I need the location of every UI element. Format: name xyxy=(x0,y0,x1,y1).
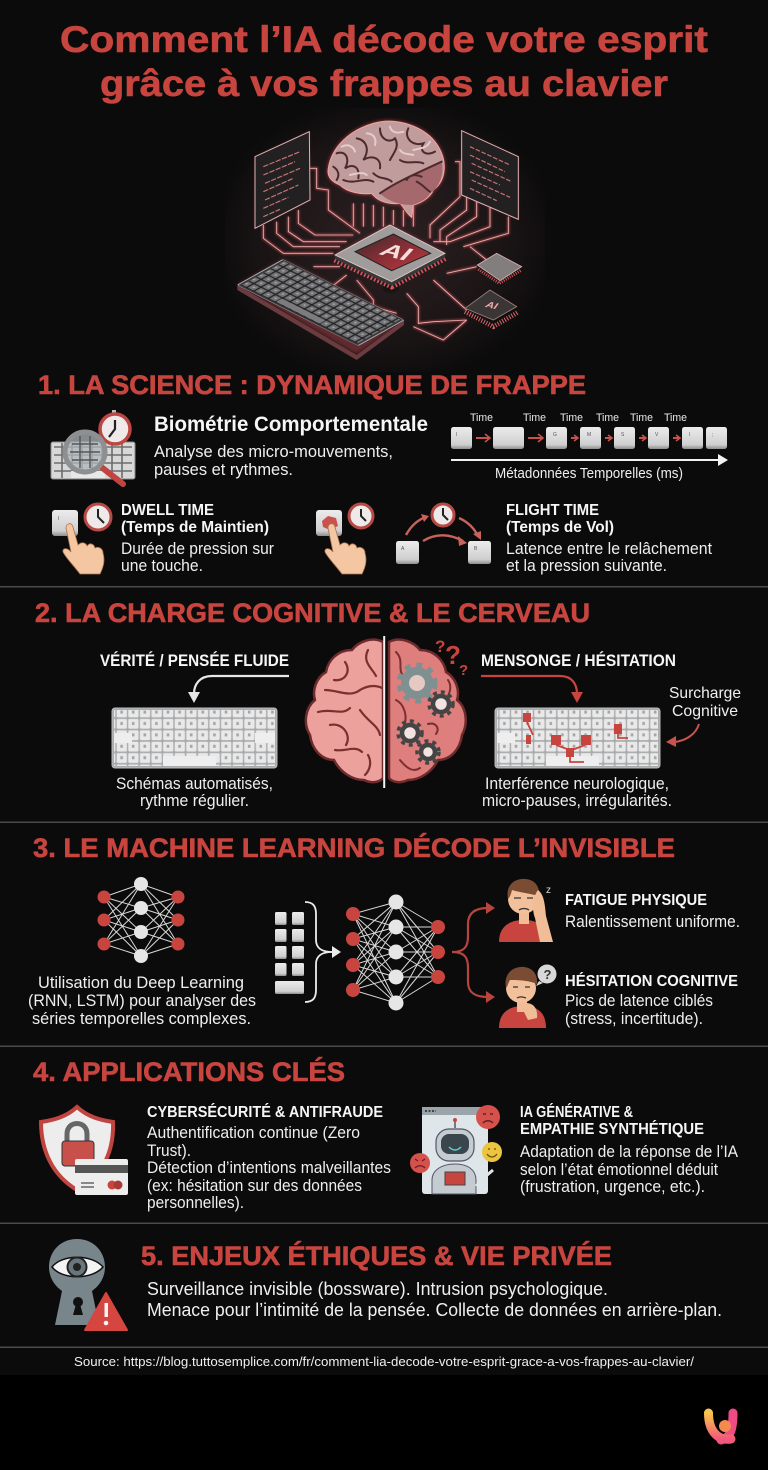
panel: section 2, charge cognitive xyxy=(35,598,741,810)
text: deep learning: (RNN, LSTM) pour analyser des xyxy=(28,991,256,1010)
diagram: key timing sequence: Time xyxy=(560,412,583,424)
arrow: network to outcomes xyxy=(452,902,495,1003)
AI processor chip xyxy=(335,225,445,293)
diagram: key timing sequence: Time xyxy=(630,412,653,424)
small AI chip xyxy=(465,290,517,327)
text: dwell time: Durée de pression sur xyxy=(121,539,274,558)
text: flight time: (Temps de Vol) xyxy=(506,519,614,536)
text: hésitation cognitive: Pics de latence ciblés xyxy=(565,991,713,1010)
text: ia générative: Adaptation de la réponse de l’IA xyxy=(520,1142,739,1161)
text: schémas automatisés: Schémas automatisés, xyxy=(116,774,273,793)
panel: section 5, enjeux éthiques xyxy=(49,1239,722,1330)
icon: hesitant person xyxy=(499,964,556,1028)
icon: neural network small xyxy=(98,877,184,963)
text: deep learning xyxy=(28,973,256,1028)
label: surcharge cognitive: Cognitive xyxy=(672,703,738,720)
heading: section 2: 2. LA CHARGE COGNITIVE & LE CERVEAU xyxy=(35,598,590,628)
label: surcharge cognitive xyxy=(669,685,741,720)
text: dwell time: une touche. xyxy=(121,556,203,575)
text: analyse xyxy=(154,442,393,479)
text: cybersécurité: Authentification continue (Zero xyxy=(147,1123,360,1142)
diagram: key timing sequence xyxy=(451,412,728,482)
text: interférence: Interférence neurologique, xyxy=(485,774,669,793)
text: hésitation cognitive xyxy=(565,971,738,1028)
brain xyxy=(328,121,444,217)
panel: section 4, applications xyxy=(33,1057,739,1212)
icon: hesitant person: ? xyxy=(544,967,552,982)
title: grâce à vos frappes au clavier xyxy=(100,63,668,104)
text: fatigue physique: FATIGUE PHYSIQUE xyxy=(565,892,707,909)
panel: section 3, machine learning xyxy=(28,833,740,1028)
heading: section 3: 3. LE MACHINE LEARNING DÉCODE L’INVISIBLE xyxy=(33,833,675,863)
text: schémas automatisés: rythme régulier. xyxy=(140,791,249,810)
text: dwell time xyxy=(121,502,274,575)
icon: split brain xyxy=(306,636,468,788)
diagram: key timing sequence: M xyxy=(587,432,591,438)
text: fatigue physique xyxy=(565,892,740,931)
heading: section 1: 1. LA SCIENCE : DYNAMIQUE DE FRAPPE xyxy=(38,370,586,400)
icon: split brain: ? xyxy=(445,640,461,670)
diagram: key timing sequence: Métadonnées Temporelles (ms) xyxy=(495,465,683,482)
arrow: brace into network xyxy=(305,902,341,1002)
arrow: vérité to keyboard xyxy=(188,676,289,703)
text: enjeux xyxy=(147,1279,722,1320)
icon: input keys xyxy=(275,912,304,994)
text: deep learning: Utilisation du Deep Learning xyxy=(38,973,244,992)
icon: split brain: ? xyxy=(435,637,445,656)
text: cybersécurité xyxy=(147,1104,391,1212)
text: interférence xyxy=(482,774,672,810)
text: dwell time: DWELL TIME xyxy=(121,502,214,519)
panel: section 1, la science xyxy=(38,370,728,575)
text: ia générative xyxy=(520,1104,739,1196)
text: flight time xyxy=(506,502,712,575)
text: cybersécurité: personnelles). xyxy=(147,1193,244,1212)
diagram: key timing sequence: G xyxy=(553,432,557,438)
keyboard xyxy=(237,259,404,360)
text: enjeux: Surveillance invisible (bossware). Intrusion psychologique. xyxy=(147,1279,608,1299)
left keyboard xyxy=(112,708,277,768)
text: cybersécurité: CYBERSÉCURITÉ & ANTIFRAUDE xyxy=(147,1104,383,1121)
hero illustration: brain, AI chip and keyboard xyxy=(225,108,545,372)
diagram: key timing sequence: Time xyxy=(596,412,619,424)
icon: split brain: ? xyxy=(459,662,468,679)
text: hésitation cognitive: HÉSITATION COGNITIVE xyxy=(565,971,738,990)
arrow: surcharge to keyboard xyxy=(666,724,699,747)
icon: dwell time key and hand xyxy=(52,504,111,574)
title: Comment l’IA décode votre esprit xyxy=(60,19,708,60)
text: flight time: FLIGHT TIME xyxy=(506,502,599,519)
text: ia générative: (frustration, urgence, etc.). xyxy=(520,1177,705,1196)
icon: tired person: z xyxy=(546,885,551,896)
diagram: key timing sequence: I xyxy=(456,432,457,438)
subheading: biométrie comportementale: Biométrie Comportementale xyxy=(154,413,428,436)
diagram: key timing sequence: S xyxy=(621,432,625,438)
text: hésitation cognitive: (stress, incertitude). xyxy=(565,1009,703,1028)
text: schémas automatisés xyxy=(116,774,273,810)
AI processor chip: AI xyxy=(374,240,418,264)
text: fatigue physique: Ralentissement uniforme. xyxy=(565,912,740,931)
text: analyse: Analyse des micro-mouvements, xyxy=(154,442,393,461)
text: analyse: pauses et rythmes. xyxy=(154,460,293,479)
text: flight time: et la pression suivante. xyxy=(506,556,667,575)
right code panel xyxy=(462,131,518,219)
source line: Source: https://blog.tuttosemplice.com/fr/comment-lia-decode-votre-esprit-grace-a-vos-frappes-au-clavier/ xyxy=(74,1355,695,1369)
label: surcharge cognitive: Surcharge xyxy=(669,685,741,702)
label: vérité: VÉRITÉ / PENSÉE FLUIDE xyxy=(100,651,289,670)
text: ia générative: selon l’état émotionnel déduit xyxy=(520,1160,718,1179)
small grey chip xyxy=(477,253,522,283)
icon: eye keyhole with warning xyxy=(49,1239,127,1330)
title xyxy=(60,19,708,104)
logo xyxy=(708,1413,733,1440)
text: deep learning: séries temporelles complexes. xyxy=(32,1009,251,1028)
icon: tired person xyxy=(499,879,553,942)
icon: shield, padlock and card xyxy=(41,1107,128,1195)
icon: robot with emotion faces xyxy=(410,1105,502,1194)
label: mensonge: MENSONGE / HÉSITATION xyxy=(481,651,676,670)
icon: dwell time key and hand: I xyxy=(58,516,59,522)
text: ia générative: EMPATHIE SYNTHÉTIQUE xyxy=(520,1121,704,1138)
text: ia générative: IA GÉNÉRATIVE & xyxy=(520,1104,633,1121)
diagram: key timing sequence: ; xyxy=(712,432,713,438)
diagram: key timing sequence: Time xyxy=(664,412,687,424)
text: cybersécurité: Détection d’intentions malveillantes xyxy=(147,1158,391,1177)
icon: keyboard, magnifier and stopwatch xyxy=(51,410,135,484)
arrow: mensonge to keyboard xyxy=(481,676,583,703)
icon: flight time keys, clock and arrows: B xyxy=(474,546,478,552)
heading: section 5: 5. ENJEUX ÉTHIQUES & VIE PRIVÉE xyxy=(141,1241,612,1271)
text: dwell time: (Temps de Maintien) xyxy=(121,519,269,536)
diagram: key timing sequence: Time xyxy=(470,412,493,424)
diagram: key timing sequence: Time xyxy=(523,412,546,424)
text: flight time: Latence entre le relâchement xyxy=(506,539,712,558)
text: interférence: micro-pauses, irrégularités. xyxy=(482,791,672,810)
icon: flight time keys, clock and arrows xyxy=(396,504,491,564)
text: cybersécurité: (ex: hésitation sur des données xyxy=(147,1176,362,1195)
circuit traces xyxy=(263,162,508,340)
icon: key press and hand xyxy=(316,504,373,574)
icon: neural network large xyxy=(346,894,445,1010)
text: enjeux: Menace pour l’intimité de la pensée. Collecte de données en arrière-plan. xyxy=(147,1300,722,1320)
right keyboard with red hesitation keys xyxy=(495,708,660,768)
small AI chip: AI xyxy=(483,300,500,311)
heading: section 4: 4. APPLICATIONS CLÉS xyxy=(33,1057,345,1087)
icon: flight time keys, clock and arrows: A xyxy=(401,546,405,552)
diagram: key timing sequence: I xyxy=(689,432,690,438)
diagram: key timing sequence: V xyxy=(655,432,659,438)
left code panel xyxy=(255,132,310,228)
text: cybersécurité: Trust). xyxy=(147,1141,191,1160)
